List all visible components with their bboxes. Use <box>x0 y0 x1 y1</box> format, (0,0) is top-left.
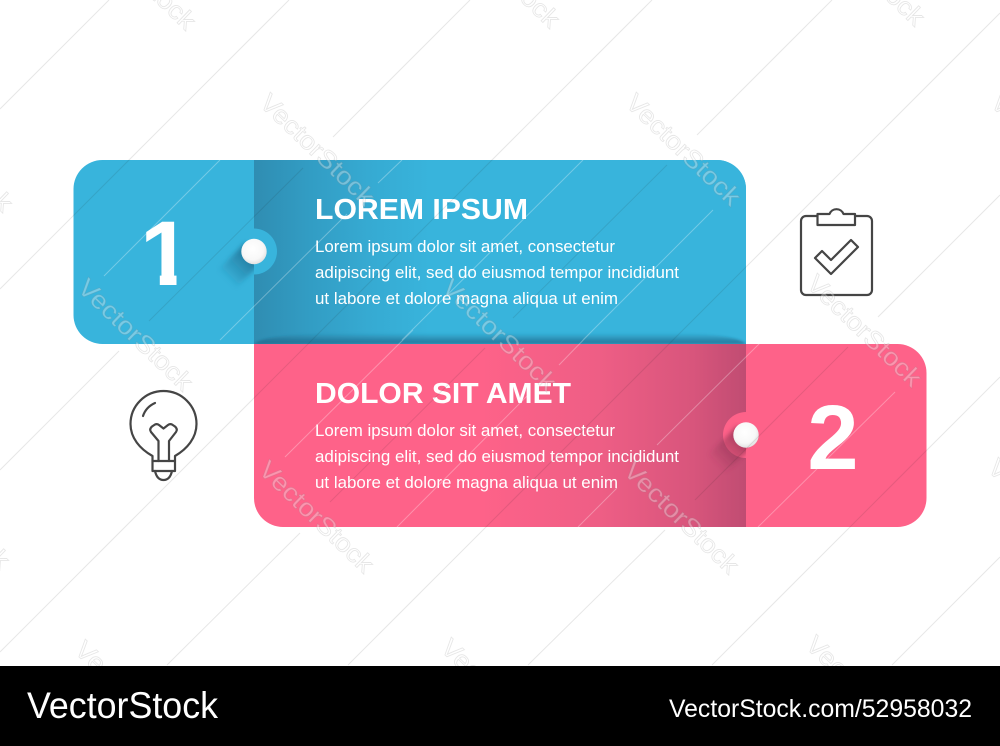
pink panel shape <box>254 344 926 527</box>
footer image id: VectorStock.com/52958032 <box>669 695 972 723</box>
heading 2: DOLOR SIT AMET <box>315 378 571 410</box>
watermark text: VectorStock <box>435 634 561 746</box>
overlap shadow <box>254 333 746 344</box>
ball shadow <box>222 242 254 284</box>
body text 2: ut labore et dolore magna aliqua ut enim <box>315 474 618 492</box>
body text 1: Lorem ipsum dolor sit amet, consectetur <box>315 238 616 256</box>
heading 1: LOREM IPSUM <box>315 194 528 226</box>
icon: light bulb <box>130 391 196 480</box>
blue panel shape <box>74 160 746 344</box>
body text 1: adipiscing elit, sed do eiusmod tempor incididunt <box>315 264 679 282</box>
number 1: 1 <box>140 203 191 305</box>
watermark text: VectorStock <box>800 631 926 746</box>
watermark text: VectorStock <box>253 456 379 579</box>
ball shadow <box>714 424 746 466</box>
ball <box>733 422 759 448</box>
number 2: 2 <box>807 387 859 489</box>
watermark text: VectorStock <box>801 270 927 393</box>
panel: step 1 blue <box>74 160 746 344</box>
panel: step 2 pink <box>254 333 926 527</box>
notch <box>723 412 746 458</box>
watermark text: VectorStock <box>620 89 746 212</box>
fold shading <box>480 344 746 527</box>
body text 2: Lorem ipsum dolor sit amet, consectetur <box>315 422 616 440</box>
notch <box>254 228 277 274</box>
body text 2 <box>315 422 679 492</box>
watermark text: VectorStock <box>254 89 380 212</box>
ball <box>241 239 267 264</box>
body text 2: adipiscing elit, sed do eiusmod tempor incididunt <box>315 448 679 466</box>
icon: clipboard with check mark <box>801 209 872 295</box>
watermark text: VectorStock <box>69 636 195 746</box>
watermark text: VectorStock <box>72 274 198 397</box>
watermark text: VectorStock <box>618 457 744 580</box>
watermark text: VectorStock <box>436 274 562 397</box>
body text 1 <box>315 238 679 308</box>
footer logo text: VectorStock <box>27 685 218 726</box>
fold shading <box>254 160 746 344</box>
body text 1: ut labore et dolore magna aliqua ut enim <box>315 290 618 308</box>
footer bar <box>0 666 1000 746</box>
